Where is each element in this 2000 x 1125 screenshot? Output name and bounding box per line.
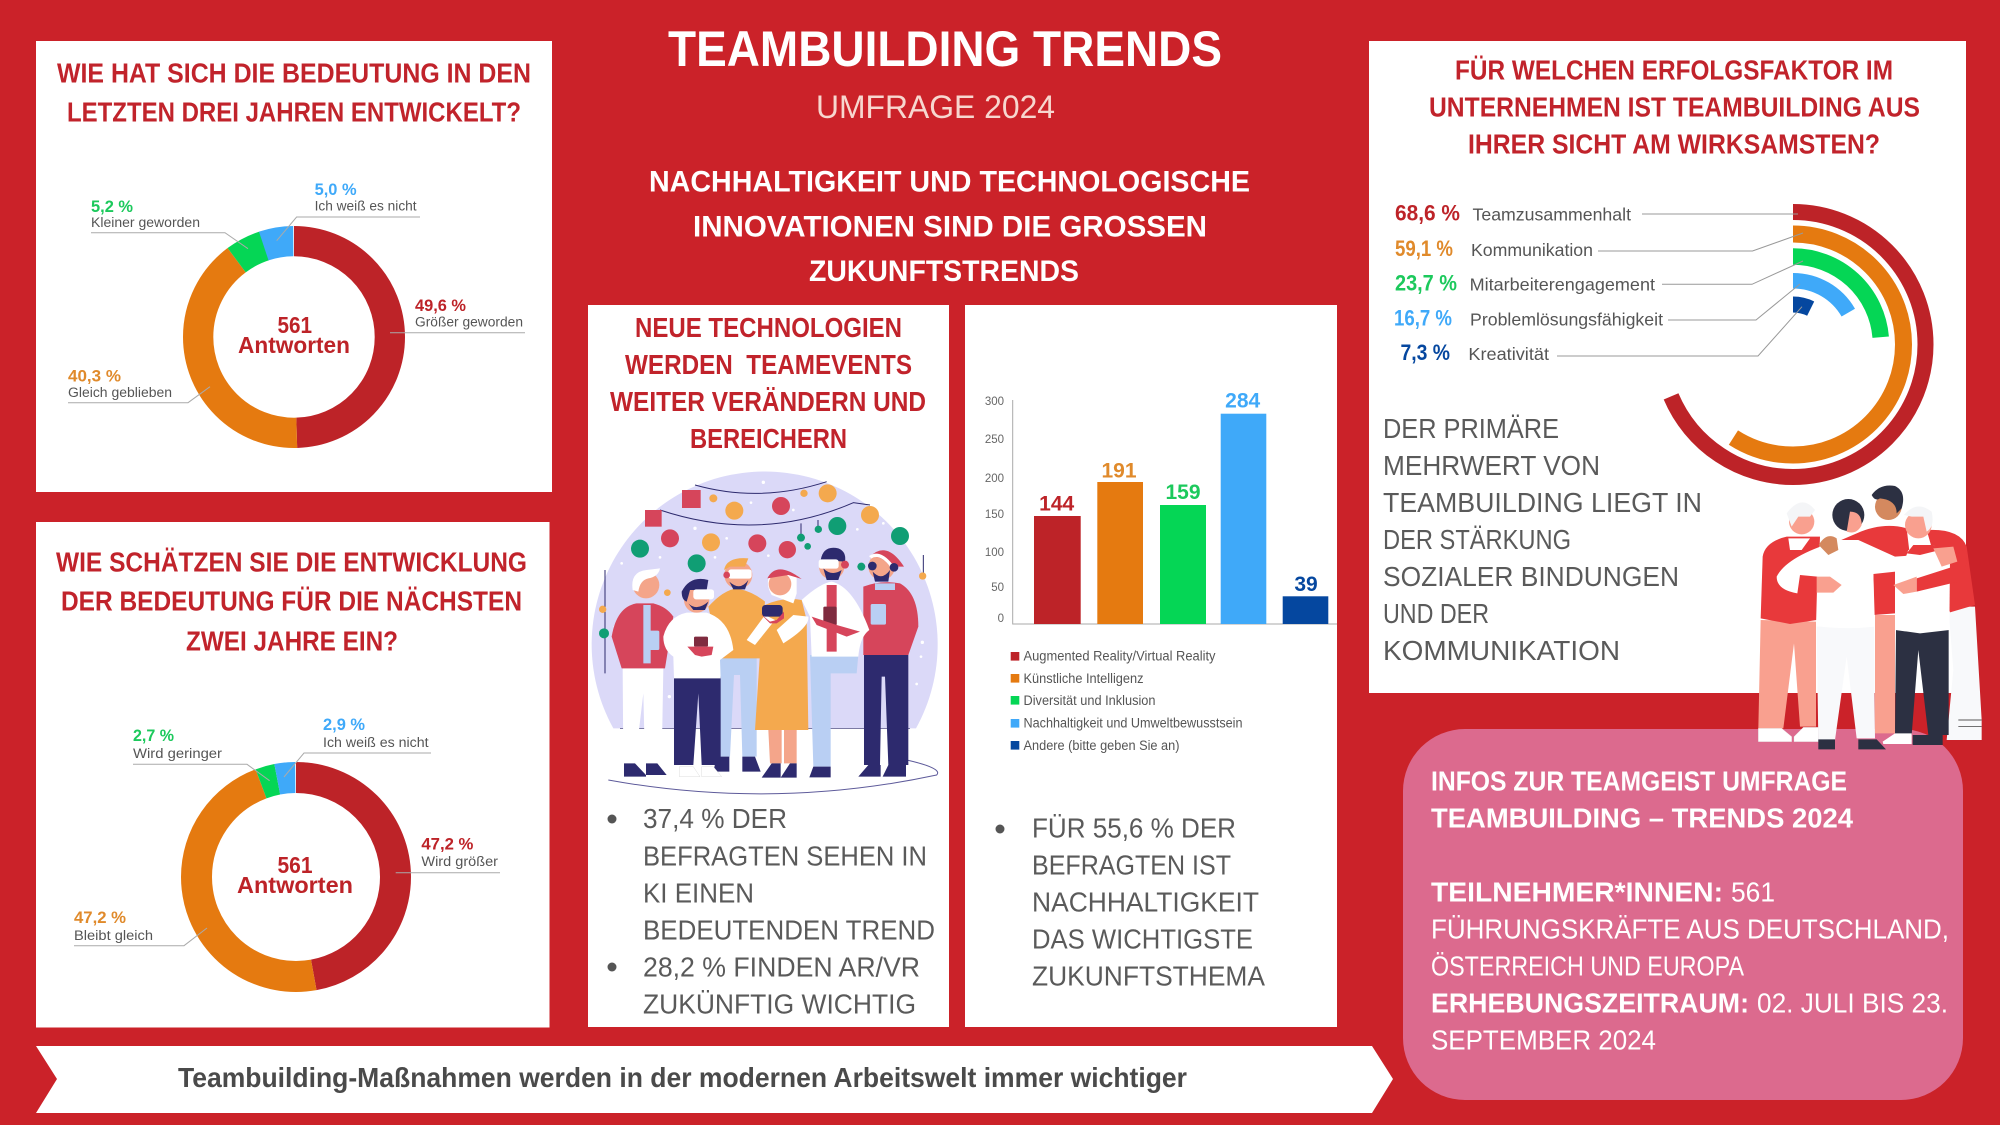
data labels: Größer geworden	[415, 315, 523, 330]
bar chart: 100	[985, 547, 1004, 559]
bullet list: KI EINEN	[643, 878, 754, 908]
heading: LETZTEN DREI JAHREN ENTWICKELT?	[67, 96, 521, 128]
panel: bar chart future topics	[965, 305, 1337, 1027]
survey info text: SEPTEMBER 2024	[1431, 1024, 1656, 1056]
bullet list: BEDEUTENDEN TREND	[643, 914, 935, 946]
bar chart	[985, 390, 1337, 625]
bullet list: 28,2 % FINDEN AR/VR	[643, 952, 920, 982]
text block: primary added value: SOZIALER BINDUNGEN	[1383, 561, 1679, 592]
banner text: Teambuilding-Maßnahmen werden in der modernen Arbeitswelt immer wichtiger	[178, 1062, 1187, 1093]
data labels: 47,2 %	[74, 908, 126, 927]
heading: WIE SCHÄTZEN SIE DIE ENTWICKLUNG	[56, 546, 527, 578]
data labels: 5,0 %	[315, 180, 357, 199]
panel: survey info	[1403, 729, 1963, 1100]
survey info text: TEAMBUILDING – TRENDS 2024	[1431, 802, 1853, 834]
bullet text: BEFRAGTEN IST	[1032, 850, 1231, 880]
survey info text: 561	[1731, 876, 1775, 908]
panel: success factor	[1369, 41, 1966, 693]
text block: primary added value: DER STÄRKUNG	[1383, 524, 1571, 555]
chart legend: Diversität und Inklusion	[1024, 693, 1156, 708]
text block: primary added value: UND DER	[1383, 598, 1489, 629]
headline: INNOVATIONEN SIND DIE GROSSEN	[693, 210, 1207, 244]
bullet text	[996, 812, 1265, 992]
survey info text: ÖSTERREICH UND EUROPA	[1431, 950, 1744, 982]
data labels: 2,7 %	[133, 726, 174, 745]
radial chart labels: 7,3 %	[1400, 340, 1450, 365]
radial chart labels: 16,7 %	[1394, 306, 1452, 331]
heading: FÜR WELCHEN ERFOLGSFAKTOR IM	[1455, 54, 1893, 86]
person 2	[674, 677, 721, 765]
radial chart labels: 59,1 %	[1395, 236, 1453, 261]
data labels: Ich weiß es nicht	[323, 735, 429, 750]
heading: WERDEN TEAMEVENTS	[625, 349, 912, 380]
heading: UNTERNEHMEN IST TEAMBUILDING AUS	[1429, 92, 1920, 122]
donut center label: Antworten	[238, 332, 350, 358]
radial chart labels	[1394, 201, 1803, 365]
panel: past three years donut	[36, 41, 552, 492]
heading: BEREICHERN	[690, 423, 847, 454]
data labels: Wird geringer	[133, 746, 223, 761]
bar chart: 150	[985, 509, 1004, 521]
donut center label	[237, 852, 353, 898]
bullet text: ZUKUNFTSTHEMA	[1032, 960, 1265, 992]
banner arrow	[36, 1046, 1393, 1113]
bar chart: 200	[985, 473, 1004, 485]
subtitle: UMFRAGE 2024	[816, 89, 1055, 125]
person 6	[864, 653, 908, 765]
bar chart: 250	[985, 434, 1004, 446]
bullet text: DAS WICHTIGSTE	[1032, 924, 1253, 954]
data labels: 47,2 %	[421, 834, 473, 853]
data labels: Gleich geblieben	[68, 385, 172, 400]
title: TEAMBUILDING TRENDS	[668, 21, 1222, 77]
bar chart: 50	[991, 582, 1004, 594]
heading: NEUE TECHNOLOGIEN	[635, 312, 902, 343]
heading	[56, 546, 527, 656]
text block: primary added value: KOMMUNIKATION	[1383, 635, 1620, 666]
radial chart labels: 23,7 %	[1395, 271, 1457, 296]
text block: primary added value: TEAMBUILDING LIEGT IN	[1383, 487, 1702, 518]
survey info text: INFOS ZUR TEAMGEIST UMFRAGE	[1431, 766, 1847, 796]
donut center label: 561	[278, 852, 313, 878]
radial bar chart	[1660, 212, 1926, 477]
right person D	[1895, 629, 1949, 735]
donut center label: 561	[278, 312, 312, 338]
centre person B	[1817, 627, 1875, 740]
radial chart labels: Kommunikation	[1471, 240, 1593, 260]
survey info text: 02. JULI BIS 23.	[1757, 988, 1948, 1018]
chart legend: Augmented Reality/Virtual Reality	[1024, 648, 1216, 664]
bullet text: FÜR 55,6 % DER	[1032, 812, 1236, 844]
data labels	[68, 180, 525, 403]
panel: next two years donut	[36, 522, 550, 1028]
heading: IHRER SICHT AM WIRKSAMSTEN?	[1468, 128, 1880, 160]
illustration: team with VR headsets and Christmas decorations	[592, 472, 938, 794]
bar chart: 300	[985, 396, 1004, 408]
donut chart	[196, 778, 396, 976]
bullet list	[608, 803, 935, 1020]
heading	[1429, 54, 1920, 160]
bar chart: 144	[1039, 493, 1075, 516]
bar chart: 191	[1101, 460, 1137, 483]
bar chart: 39	[1294, 573, 1318, 596]
data labels: Bleibt gleich	[74, 928, 153, 943]
back person C	[1875, 615, 1895, 733]
data labels: Wird größer	[421, 854, 499, 869]
heading: DER BEDEUTUNG FÜR DIE NÄCHSTEN	[61, 586, 522, 616]
headline: NACHHALTIGKEIT UND TECHNOLOGISCHE	[649, 166, 1250, 198]
chart legend	[1011, 648, 1242, 753]
survey info text: TEILNEHMER*INNEN:	[1431, 876, 1723, 908]
bullet list: ZUKÜNFTIG WICHTIG	[643, 988, 916, 1020]
person 3	[720, 657, 757, 757]
bullet list: 37,4 % DER	[643, 803, 787, 834]
text block: primary added value: MEHRWERT VON	[1383, 450, 1600, 481]
chart legend: Nachhaltigkeit und Umweltbewusstsein	[1024, 716, 1242, 730]
data labels: Ich weiß es nicht	[315, 199, 417, 214]
survey info text: FÜHRUNGSKRÄFTE AUS DEUTSCHLAND,	[1431, 914, 1949, 944]
person 4 woman	[768, 730, 797, 763]
radial chart labels: Mitarbeiterengagement	[1470, 275, 1655, 295]
bar chart: 159	[1165, 481, 1201, 504]
main title block	[649, 21, 1250, 288]
heading	[57, 58, 531, 128]
survey info text	[1431, 766, 1949, 1056]
donut chart	[198, 241, 390, 433]
bar chart: 284	[1225, 390, 1261, 413]
data labels	[74, 715, 500, 946]
headline: ZUKUNFTSTRENDS	[809, 255, 1079, 288]
person 5	[810, 655, 858, 767]
bullet list: BEFRAGTEN SEHEN IN	[643, 840, 927, 872]
data labels: 5,2 %	[91, 197, 133, 216]
radial chart labels: Problemlösungsfähigkeit	[1470, 310, 1663, 330]
data labels: Kleiner geworden	[91, 215, 200, 230]
radial chart labels: 68,6 %	[1395, 201, 1460, 226]
heading: ZWEI JAHRE EIN?	[186, 626, 398, 656]
text block: primary added value	[1383, 413, 1702, 666]
headline	[649, 166, 1250, 288]
panel: new technologies	[588, 305, 949, 1027]
heading: WEITER VERÄNDERN UND	[610, 386, 926, 417]
person 1	[623, 668, 663, 763]
bullet text: NACHHALTIGKEIT	[1032, 886, 1259, 918]
radial chart labels: Kreativität	[1468, 344, 1549, 364]
donut center label	[238, 312, 350, 358]
data labels: 49,6 %	[415, 296, 466, 315]
heading: WIE HAT SICH DIE BEDEUTUNG IN DEN	[57, 58, 531, 88]
chart legend: Andere (bitte geben Sie an)	[1024, 738, 1180, 753]
left person A	[1758, 620, 1816, 728]
chart legend: Künstliche Intelligenz	[1024, 671, 1144, 686]
bar chart: 0	[998, 613, 1004, 625]
far right person	[1947, 607, 1982, 740]
radial chart labels: Teamzusammenhalt	[1472, 205, 1631, 225]
data labels: 40,3 %	[68, 367, 121, 386]
text block: primary added value: DER PRIMÄRE	[1383, 413, 1559, 444]
data labels: 2,9 %	[323, 715, 365, 734]
illustration: team hugging	[1758, 486, 1982, 749]
donut center label: Antworten	[237, 872, 353, 898]
survey info text: ERHEBUNGSZEITRAUM:	[1431, 988, 1749, 1018]
heading	[610, 312, 926, 454]
